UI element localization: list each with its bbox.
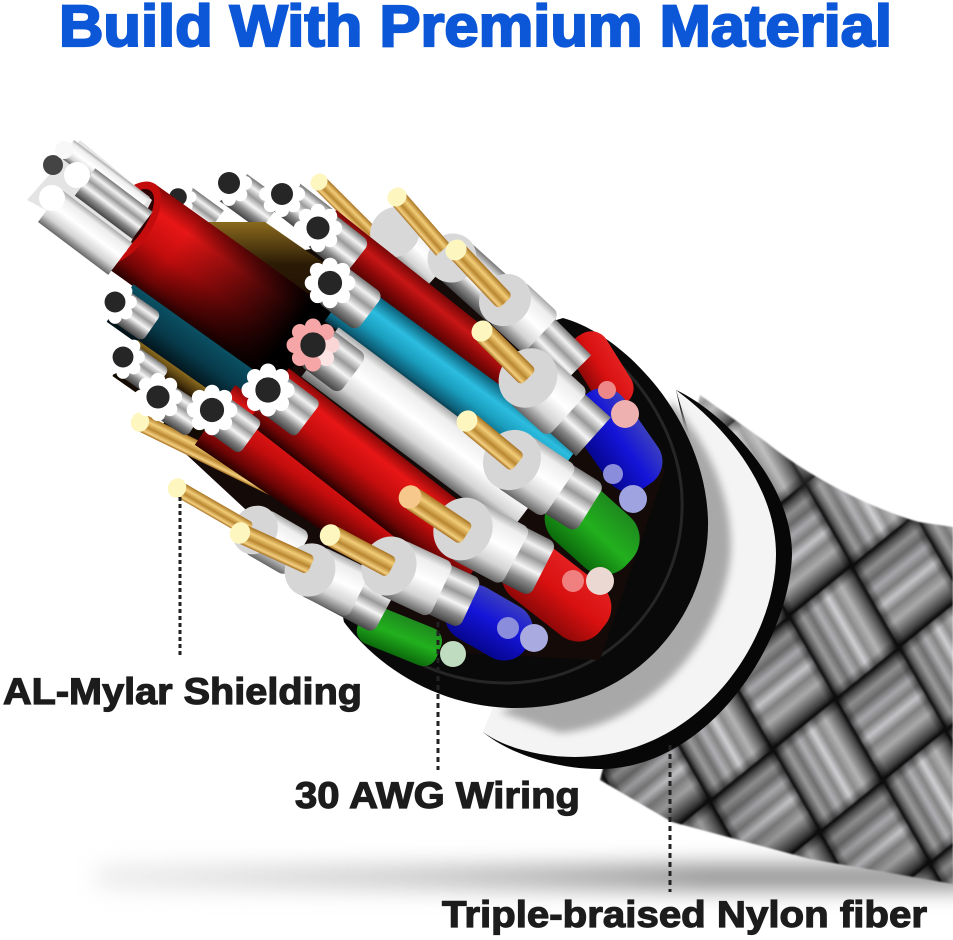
silver rods — [294, 284, 611, 633]
red wire lower centre — [247, 368, 502, 588]
wire: top heads bodies — [169, 168, 333, 239]
coloured capsules — [353, 324, 673, 670]
head 3 with body — [294, 204, 370, 275]
strand end bottom — [39, 185, 65, 211]
icon: head 2 — [259, 171, 305, 217]
brown wire — [112, 340, 244, 451]
translucent end dots — [440, 381, 647, 667]
label: 30 AWG Wiring: 30 AWG Wiring — [295, 775, 580, 816]
head 6 — [242, 364, 321, 438]
pin 4 — [486, 336, 589, 437]
long gold rod — [128, 409, 324, 519]
capsule: lower red — [490, 530, 623, 653]
capsule: lower green — [353, 601, 446, 670]
tube body — [99, 184, 332, 389]
tube fade — [98, 183, 333, 389]
icon: head 1 — [206, 160, 252, 206]
red wire lower left — [195, 385, 476, 607]
capsule: lower blue — [436, 575, 542, 670]
front black rim — [300, 318, 708, 708]
leader line: Nylon — [668, 745, 672, 892]
capsule: top red — [563, 324, 640, 415]
icon: head 11 — [160, 179, 196, 215]
white collar — [483, 390, 776, 757]
black back ring — [483, 390, 792, 769]
label: Triple-braised Nylon fiber: Triple-braised Nylon fiber — [442, 894, 927, 935]
insulated pins — [164, 235, 589, 618]
wire: olive back wire — [190, 222, 370, 345]
leader line: AL-Mylar — [178, 497, 182, 656]
rear small wires — [160, 160, 370, 345]
strand end faint — [55, 141, 73, 159]
pin 5 — [471, 419, 577, 518]
dark red wire — [308, 210, 578, 438]
pin 9 — [223, 497, 311, 577]
capsule: green — [532, 470, 652, 587]
tube opening — [80, 170, 174, 276]
cyan wire — [325, 279, 580, 486]
rim highlight — [365, 335, 682, 683]
big red tube — [80, 170, 333, 389]
strand end top — [64, 162, 90, 188]
head 9 with body — [101, 335, 170, 397]
dark star centre — [43, 155, 63, 175]
capsule: top blue — [560, 378, 673, 502]
head 7 — [187, 385, 263, 454]
ground shadow — [95, 865, 953, 889]
dark interior — [160, 240, 665, 660]
pin 7 — [352, 527, 454, 618]
braided nylon cable — [600, 395, 953, 884]
tube inner — [90, 181, 164, 265]
white wire — [301, 327, 547, 533]
head 8 — [134, 373, 206, 437]
label: AL-Mylar Shielding: AL-Mylar Shielding — [3, 671, 362, 712]
silver conductor bundle — [27, 140, 153, 275]
teal wire — [107, 284, 280, 426]
head 10 with body — [93, 280, 162, 342]
head 5 pink — [287, 319, 367, 394]
pin 3 — [468, 263, 560, 354]
gold pins rear — [307, 170, 521, 323]
collar shaded band — [500, 400, 731, 733]
pin 8 — [276, 535, 371, 618]
leader line: 30 AWG — [436, 622, 440, 770]
head 4 with body — [305, 258, 384, 331]
pin 6 — [422, 487, 531, 585]
